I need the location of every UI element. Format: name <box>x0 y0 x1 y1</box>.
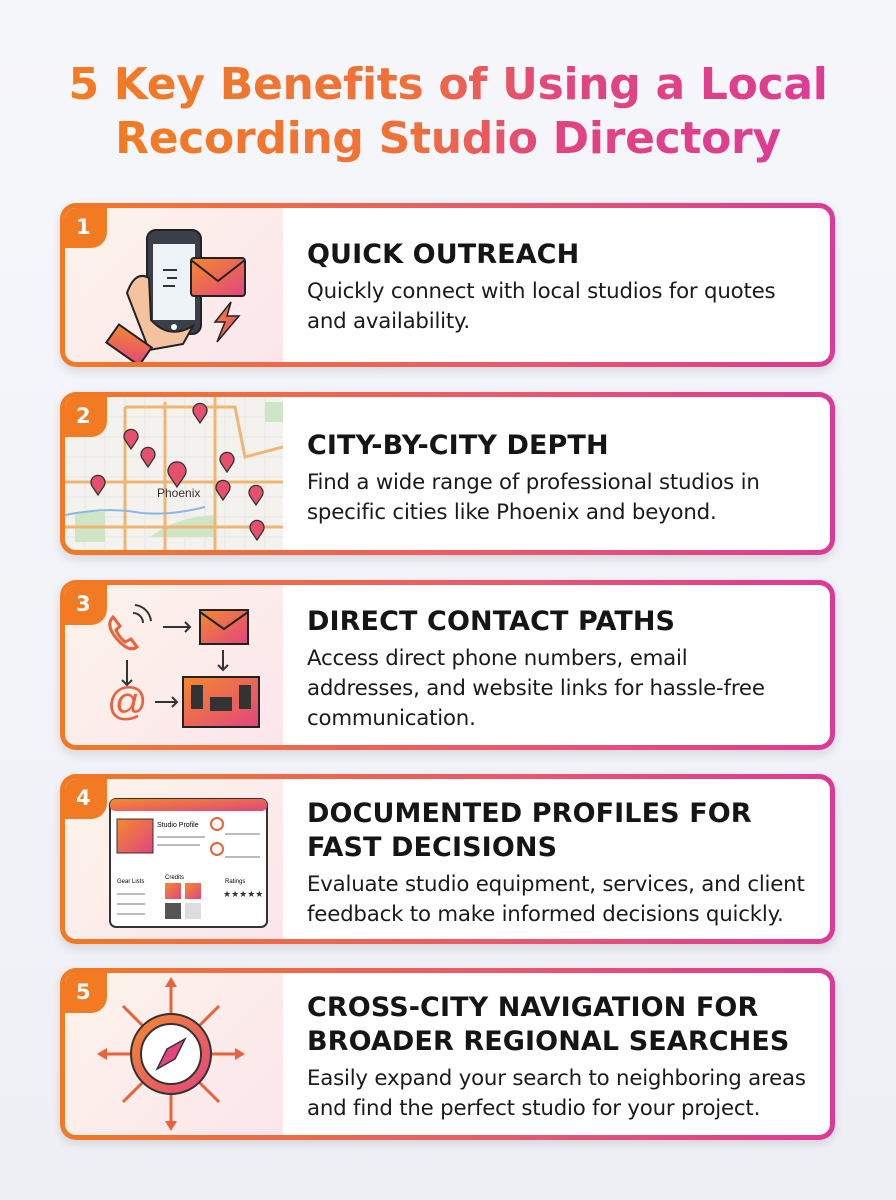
text block 5: Easily expand your search to neighboring areas <box>307 1066 806 1091</box>
icon: profile webpage: Credits <box>165 875 184 881</box>
panel: card 5 cross-city navigation: 5 <box>76 980 91 1004</box>
text block 5: BROADER REGIONAL SEARCHES <box>307 1026 789 1057</box>
icon: profile webpage: Gear Lists <box>117 879 144 885</box>
panel: card 1 quick outreach: 1 <box>76 215 91 239</box>
icon: contact paths: @ <box>107 680 148 724</box>
text block 2: specific cities like Phoenix and beyond. <box>307 500 717 525</box>
title: Recording Studio Directory <box>115 113 781 164</box>
text block 3: Access direct phone numbers, email <box>307 646 687 671</box>
text block 2 <box>307 430 760 525</box>
panel: card 3 direct contact: 3 <box>76 592 91 616</box>
text block 1 <box>307 239 775 334</box>
icon: phone with envelope <box>65 208 283 362</box>
icon: contact paths <box>65 585 283 745</box>
panel: card 1 quick outreach <box>60 203 835 367</box>
text block 5: CROSS-CITY NAVIGATION FOR <box>307 992 758 1023</box>
icon: compass with arrows <box>65 973 283 1135</box>
text block 4: FAST DECISIONS <box>307 832 557 863</box>
text block 2: CITY-BY-CITY DEPTH <box>307 430 609 461</box>
text block 3: communication. <box>307 706 476 731</box>
text block 3: DIRECT CONTACT PATHS <box>307 606 675 637</box>
text block 4: feedback to make informed decisions quickly. <box>307 902 784 927</box>
text block 3 <box>307 606 765 731</box>
text block 1: QUICK OUTREACH <box>307 239 579 270</box>
title <box>68 59 828 164</box>
panel: card 4 documented profiles <box>60 774 835 944</box>
icon: city map with pins: Phoenix <box>157 486 200 500</box>
title: 5 Key Benefits of Using a Local <box>68 59 828 110</box>
text block 3: addresses, and website links for hassle-free <box>307 676 765 701</box>
text block 1: Quickly connect with local studios for quotes <box>307 279 775 304</box>
text block 4: Evaluate studio equipment, services, and client <box>307 872 805 897</box>
icon: profile webpage <box>65 779 283 939</box>
icon: city map with pins <box>65 397 283 550</box>
panel: card 5 cross-city navigation <box>60 968 835 1140</box>
icon: profile webpage: Studio Profile <box>157 822 199 829</box>
text block 2: Find a wide range of professional studios in <box>307 470 760 495</box>
icon: profile webpage: ★★★★★ <box>223 890 263 900</box>
panel: card 2 city depth: 2 <box>76 404 91 428</box>
panel: card 4 documented profiles: 4 <box>76 786 91 810</box>
text block 1: and availability. <box>307 309 470 334</box>
text block 5: and find the perfect studio for your project. <box>307 1096 760 1121</box>
text block 4 <box>307 798 805 927</box>
text block 4: DOCUMENTED PROFILES FOR <box>307 798 752 829</box>
panel: card 3 direct contact <box>60 580 835 750</box>
icon: profile webpage: Ratings <box>225 879 245 885</box>
panel: card 2 city depth <box>60 392 835 555</box>
text block 5 <box>307 992 806 1121</box>
